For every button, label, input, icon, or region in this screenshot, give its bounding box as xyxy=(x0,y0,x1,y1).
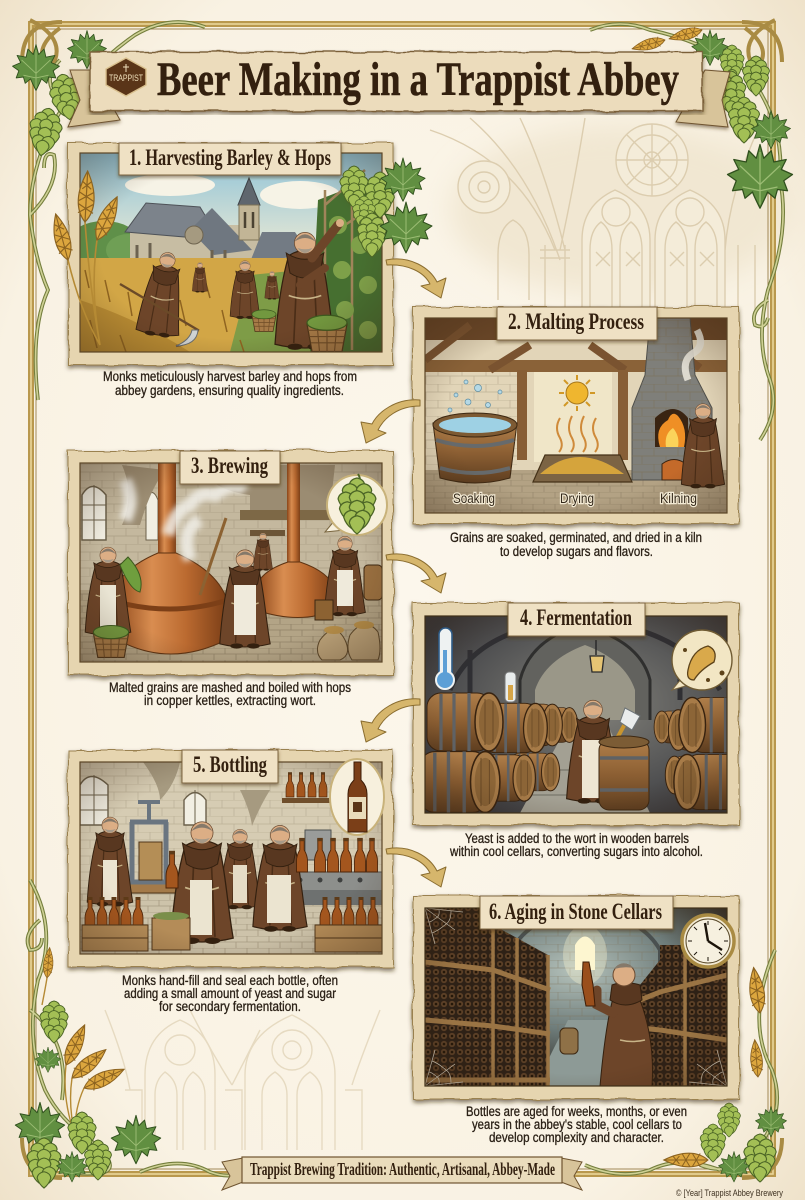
caption: step 3: in copper kettles, extracting wort. xyxy=(144,693,316,708)
vine: left side lower corner with hops, barley and leaves xyxy=(15,880,245,1188)
title plate: 4. Fermentation xyxy=(520,605,632,630)
caption: step 3 xyxy=(109,680,351,708)
panel: step 6 aging xyxy=(413,896,739,1099)
title plate: 6. Aging in Stone Cellars xyxy=(489,899,662,924)
image frame xyxy=(80,153,382,352)
vine: top right with hops, barley and leaves xyxy=(590,24,792,440)
caption: step 5 xyxy=(122,973,338,1014)
icon: thermometer xyxy=(436,628,454,689)
illustration: soaking, drying and kilning: Kilning xyxy=(660,491,697,506)
caption: step 5: for secondary fermentation. xyxy=(159,999,301,1014)
panel: step 2 malting xyxy=(413,307,739,524)
caption: step 6: develop complexity and character. xyxy=(489,1130,664,1145)
card paper xyxy=(68,451,393,675)
image frame xyxy=(80,762,382,954)
arrow: step 3 to 4 xyxy=(386,554,446,593)
caption: step 1: abbey gardens, ensuring quality ingredients. xyxy=(115,383,344,398)
hop vine with leaves xyxy=(340,158,432,257)
caption: step 3: Malted grains are mashed and boiled with hops xyxy=(109,680,351,695)
illustration: press, conveyor and monks xyxy=(80,762,382,954)
caption: step 6: years in the abbey's stable, cool cellars to xyxy=(472,1117,682,1132)
arrow: step 4 to 5 xyxy=(361,699,420,742)
title plate xyxy=(497,307,657,340)
callout: yeast icon xyxy=(672,630,732,690)
caption: step 1 xyxy=(103,369,357,398)
card paper xyxy=(413,603,739,825)
caption: step 4: Yeast is added to the wort in wooden barrels xyxy=(465,831,689,846)
image frame xyxy=(425,616,727,813)
footer banner: Trappist Brewing Tradition: Authentic, Artisanal, Abbey-Made xyxy=(250,1159,555,1179)
panel: step 1 harvesting xyxy=(49,143,432,365)
illustration: barrel cellar xyxy=(420,616,751,813)
illustration: copper kettles and monks xyxy=(80,463,382,662)
background: faint abbey architecture top right xyxy=(430,118,790,310)
background: faint abbey architecture bottom left xyxy=(105,1010,380,1150)
title plate xyxy=(180,451,280,484)
callout: hop icon xyxy=(325,474,387,535)
title banner xyxy=(68,52,730,127)
image frame xyxy=(425,908,727,1086)
image frame xyxy=(80,463,382,662)
callout: bottle icon xyxy=(330,759,384,835)
footer banner xyxy=(222,1157,582,1190)
caption: step 1: Monks meticulously harvest barley and hops from xyxy=(103,369,357,384)
illustration: soaking, drying and kilning: Drying xyxy=(560,491,594,506)
banner scroll xyxy=(90,52,703,111)
panel: step 3 brewing xyxy=(68,451,393,675)
arrow: step 1 to 2 xyxy=(386,259,446,298)
icon: clock xyxy=(682,915,734,967)
illustration: soaking, drying and kilning: Soaking xyxy=(453,491,495,506)
caption: step 2: to develop sugars and flavors. xyxy=(500,544,653,559)
barley stalks xyxy=(49,171,124,345)
arrow: step 2 to 3 xyxy=(361,400,420,443)
Trappist hexagon logo xyxy=(106,58,146,96)
card paper xyxy=(68,750,393,967)
caption: step 5: adding a small amount of yeast and sugar xyxy=(124,986,336,1001)
title plate: 5. Bottling xyxy=(193,752,267,777)
illustration: soaking, drying and kilning xyxy=(425,318,727,513)
caption: step 4: within cool cellars, converting sugars into alcohol. xyxy=(449,844,703,859)
caption: step 6: Bottles are aged for weeks, months, or even xyxy=(466,1104,687,1119)
card paper xyxy=(413,307,739,524)
illustration: bottle racks in the stone cellar xyxy=(425,908,727,1086)
caption: step 6 xyxy=(466,1104,687,1145)
vine: right side lower corner with hops, barley and leaves xyxy=(585,950,787,1182)
title plate: 2. Malting Process xyxy=(508,309,644,334)
image frame xyxy=(425,318,727,513)
illustration: barley field, abbey and monks xyxy=(68,153,382,352)
card paper xyxy=(68,143,393,365)
title plate: 1. Harvesting Barley & Hops xyxy=(129,145,331,170)
caption: step 4 xyxy=(449,831,703,859)
panel: step 5 bottling xyxy=(68,750,393,967)
Trappist hexagon logo: TRAPPIST xyxy=(109,73,143,83)
title plate xyxy=(508,603,645,636)
title plate xyxy=(119,143,341,175)
panel: step 4 fermentation xyxy=(413,603,751,825)
vine: top left with hops and leaves xyxy=(13,22,205,400)
banner ribbon tails xyxy=(68,70,730,127)
arrow: step 5 to 6 xyxy=(386,848,446,887)
card paper xyxy=(413,896,739,1099)
caption: step 2 xyxy=(450,530,702,559)
title plate xyxy=(182,750,278,783)
caption: step 5: Monks hand-fill and seal each bottle, often xyxy=(122,973,338,988)
title plate xyxy=(480,896,673,929)
title plate: 3. Brewing xyxy=(191,453,268,478)
caption: step 2: Grains are soaked, germinated, and dried in a kiln xyxy=(450,530,702,545)
